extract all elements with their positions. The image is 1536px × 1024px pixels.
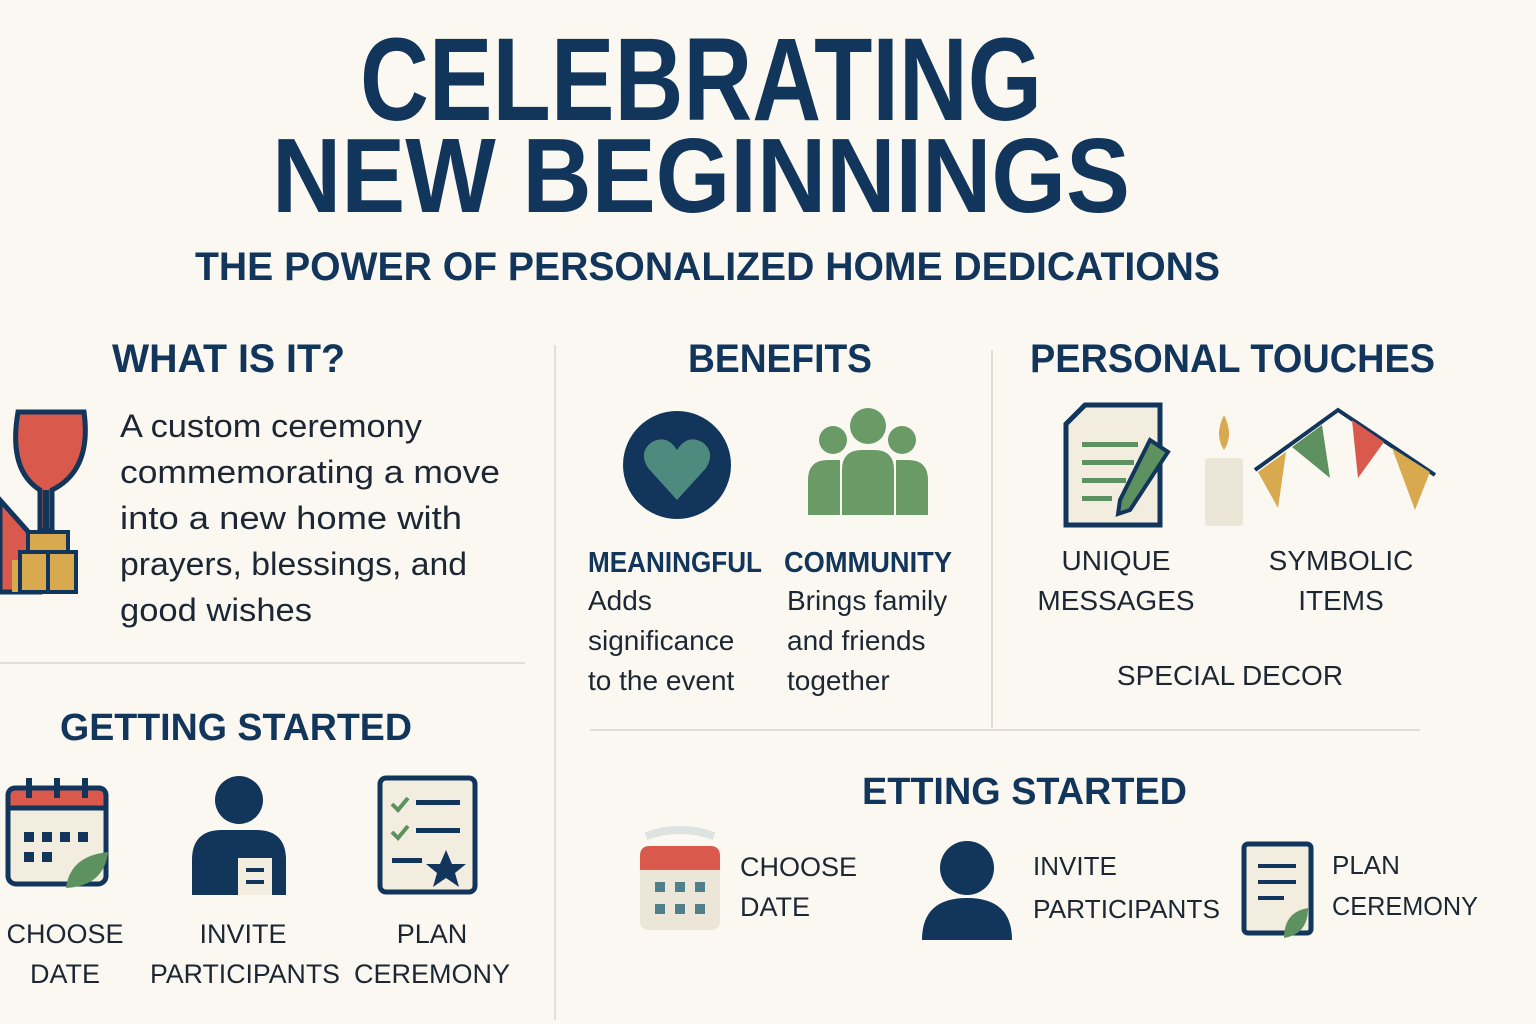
labels: touches: ITEMS — [1298, 585, 1384, 616]
text: definition: prayers, blessings, and — [120, 546, 467, 582]
text: invite participants: INVITE — [1033, 851, 1117, 881]
title: NEW BEGINNINGS — [272, 117, 1130, 235]
icon: glass and house — [0, 412, 85, 592]
text: plan ceremony: PLAN — [1332, 850, 1400, 880]
text: community: together — [787, 665, 890, 696]
icon: calendar right — [640, 830, 720, 930]
icon: heart — [623, 411, 731, 519]
labels: steps: PARTICIPANTS — [150, 959, 340, 989]
labels: touches — [1037, 545, 1413, 691]
text: meaningful: to the event — [588, 665, 735, 696]
text: definition — [120, 408, 500, 628]
title: CELEBRATING — [360, 14, 1042, 146]
text: definition: into a new home with — [120, 500, 462, 536]
text: definition: good wishes — [120, 592, 312, 628]
icon: document right — [1244, 844, 1311, 938]
labels: steps: CEREMONY — [354, 959, 510, 989]
text: choose date — [740, 852, 857, 922]
text: meaningful: Adds — [588, 585, 652, 616]
panel: benefits — [588, 337, 952, 696]
text: plan ceremony: CEREMONY — [1332, 891, 1478, 921]
text: invite participants — [1033, 851, 1220, 924]
icon: document with pen — [1066, 405, 1168, 525]
subtitle: THE POWER OF PERSONALIZED HOME DEDICATIONS — [195, 245, 1220, 289]
icon: candle — [1205, 415, 1243, 526]
labels: touches: UNIQUE — [1062, 545, 1170, 576]
icon: checklist — [380, 778, 475, 892]
heading: benefits: BENEFITS — [688, 337, 872, 381]
panel: getting started left — [6, 707, 510, 989]
heading: personal touches: PERSONAL TOUCHES — [1030, 337, 1435, 381]
text: invite participants: PARTICIPANTS — [1033, 894, 1220, 924]
labels: steps: INVITE — [199, 919, 287, 949]
text: choose date: DATE — [740, 892, 810, 922]
panel: personal touches — [1030, 337, 1435, 691]
labels: touches: MESSAGES — [1037, 585, 1195, 616]
text: meaningful: MEANINGFUL — [588, 547, 762, 579]
text: choose date: CHOOSE — [740, 852, 857, 882]
text: community: Brings family — [787, 585, 947, 616]
text: plan ceremony — [1332, 850, 1478, 921]
icon: person — [192, 776, 286, 895]
heading: etting started: ETTING STARTED — [862, 771, 1187, 813]
icon: community — [808, 408, 928, 515]
panel: getting started right — [640, 771, 1478, 940]
text: meaningful — [588, 547, 762, 696]
title — [272, 14, 1130, 235]
labels: touches: SPECIAL DECOR — [1117, 660, 1343, 691]
text: community: and friends — [787, 625, 926, 656]
text: definition: A custom ceremony — [120, 408, 422, 444]
labels: touches: SYMBOLIC — [1269, 545, 1413, 576]
labels: steps: CHOOSE — [6, 919, 124, 949]
icon: bunting — [1255, 410, 1435, 510]
text: community — [784, 547, 952, 696]
panel: what is it — [0, 337, 500, 628]
heading: getting started: GETTING STARTED — [60, 707, 412, 749]
heading: what is it: WHAT IS IT? — [112, 337, 345, 381]
icon: calendar — [8, 778, 108, 888]
text: definition: commemorating a move — [120, 454, 500, 490]
text: community: COMMUNITY — [784, 547, 952, 579]
labels: steps: PLAN — [397, 919, 467, 949]
labels: steps: DATE — [30, 959, 100, 989]
labels: steps — [6, 919, 510, 989]
icon: person right — [922, 841, 1012, 940]
text: meaningful: significance — [588, 625, 734, 656]
